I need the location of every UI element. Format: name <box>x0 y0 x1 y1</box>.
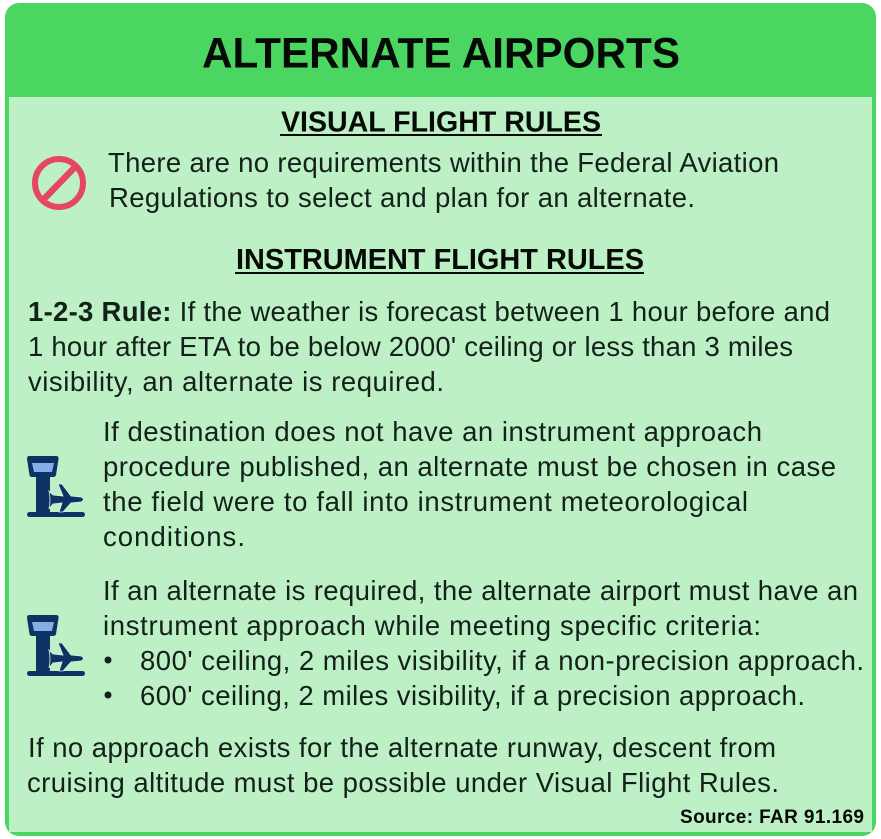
title: ALTERNATE AIRPORTS <box>202 30 680 78</box>
text block: VFR note: There are no requirements within the Federal Aviation <box>108 147 779 178</box>
text block: alternate criteria: 800' ceiling, 2 miles visibility, if a non-precision approach. <box>140 645 864 676</box>
text block: VFR note: Regulations to select and plan for an alternate. <box>109 182 695 213</box>
text block: no instrument approach: conditions. <box>103 521 245 552</box>
text block: no instrument approach: If destination does not have an instrument approach <box>103 416 762 447</box>
text block: 1-2-3 rule: 1 hour after ETA to be below 2000' ceiling or less than 3 miles <box>28 331 793 362</box>
icon: prohibited sign <box>35 159 83 207</box>
source note: Source: FAR 91.169 <box>680 807 864 828</box>
text block: alternate criteria: instrument approach while meeting specific criteria: <box>103 610 761 641</box>
text block: no approach note: cruising altitude must be possible under Visual Flight Rules. <box>27 767 779 798</box>
text block: 1-2-3 rule: visibility, an alternate is required. <box>28 366 444 397</box>
text block: no instrument approach <box>103 416 836 552</box>
icon: control tower and plane <box>27 615 85 676</box>
heading: instrument flight rules: INSTRUMENT FLIGHT RULES <box>236 244 644 276</box>
icon: control tower and plane <box>27 456 85 517</box>
text block: no approach note <box>27 732 779 798</box>
text block: VFR note <box>108 147 779 213</box>
text block: alternate criteria: 600' ceiling, 2 miles visibility, if a precision approach. <box>140 680 805 711</box>
text block: no approach note: If no approach exists for the alternate runway, descent from <box>28 732 776 763</box>
text block: alternate criteria <box>103 575 864 711</box>
text block: alternate criteria: If an alternate is required, the alternate airport must have an <box>103 575 858 606</box>
text block: 1-2-3 rule <box>28 296 830 397</box>
heading: visual flight rules: VISUAL FLIGHT RULES <box>281 106 601 138</box>
text block: 1-2-3 rule: 1-2-3 Rule: If the weather is forecast between 1 hour before and <box>28 296 830 327</box>
text block: no instrument approach: procedure published, an alternate must be chosen in case <box>103 451 836 482</box>
text block: no instrument approach: the field were to fall into instrument meteorological <box>103 486 748 517</box>
